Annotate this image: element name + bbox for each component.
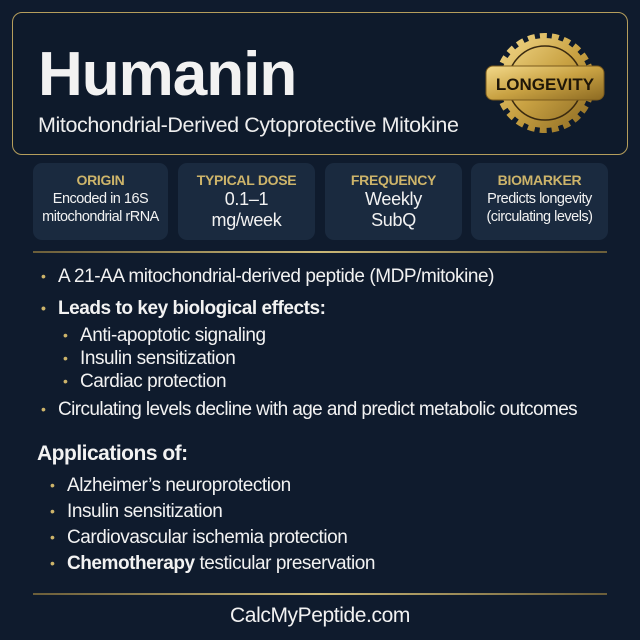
applications heading: Applications of:	[37, 442, 188, 465]
bullet list: mechanism: Leads to key biological effects:	[58, 298, 326, 319]
applications list: Cardiovascular ischemia protection	[67, 527, 347, 548]
subtitle: Mitochondrial-Derived Cytoprotective Mitokine	[38, 113, 459, 137]
card: biomarker	[471, 163, 608, 240]
applications list	[50, 475, 375, 574]
card: origin: Encoded in 16S	[53, 191, 148, 207]
card: frequency: Weekly	[365, 189, 422, 209]
card: frequency: SubQ	[371, 210, 416, 230]
card: biomarker: Predicts longevity	[487, 191, 592, 207]
bullet list: mechanism: Cardiac protection	[80, 371, 226, 392]
bullet list: mechanism: Anti-apoptotic signaling	[80, 325, 266, 346]
badge: longevity: LONGEVITY	[496, 75, 595, 94]
applications list: Chemotherapy testicular preservation	[67, 553, 375, 574]
badge: longevity	[486, 33, 604, 133]
card: origin: ORIGIN	[76, 172, 124, 188]
header panel	[12, 12, 628, 155]
applications list: Alzheimer’s neuroprotection	[67, 475, 291, 496]
bullet list: mechanism: A 21-AA mitochondrial-derived peptide (MDP/mitokine)	[58, 266, 494, 287]
card: frequency: FREQUENCY	[351, 172, 436, 188]
applications list: Insulin sensitization	[67, 501, 222, 522]
bullet list: mechanism: Circulating levels decline with age and predict metabolic outcomes	[58, 399, 577, 420]
card: typical dose: TYPICAL DOSE	[197, 172, 296, 188]
bullet list: mechanism	[42, 266, 577, 420]
card: typical dose: 0.1–1	[225, 189, 268, 209]
card: typical dose	[178, 163, 315, 240]
card: typical dose: mg/week	[212, 210, 281, 230]
title: Humanin	[38, 40, 296, 109]
card: biomarker: BIOMARKER	[498, 172, 581, 188]
card: origin: mitochondrial rRNA	[42, 209, 159, 225]
card: biomarker: (circulating levels)	[486, 209, 593, 225]
card: origin	[33, 163, 168, 240]
bullet list: mechanism: Insulin sensitization	[80, 348, 235, 369]
card: frequency	[325, 163, 462, 240]
footer: CalcMyPeptide.com	[230, 604, 410, 627]
